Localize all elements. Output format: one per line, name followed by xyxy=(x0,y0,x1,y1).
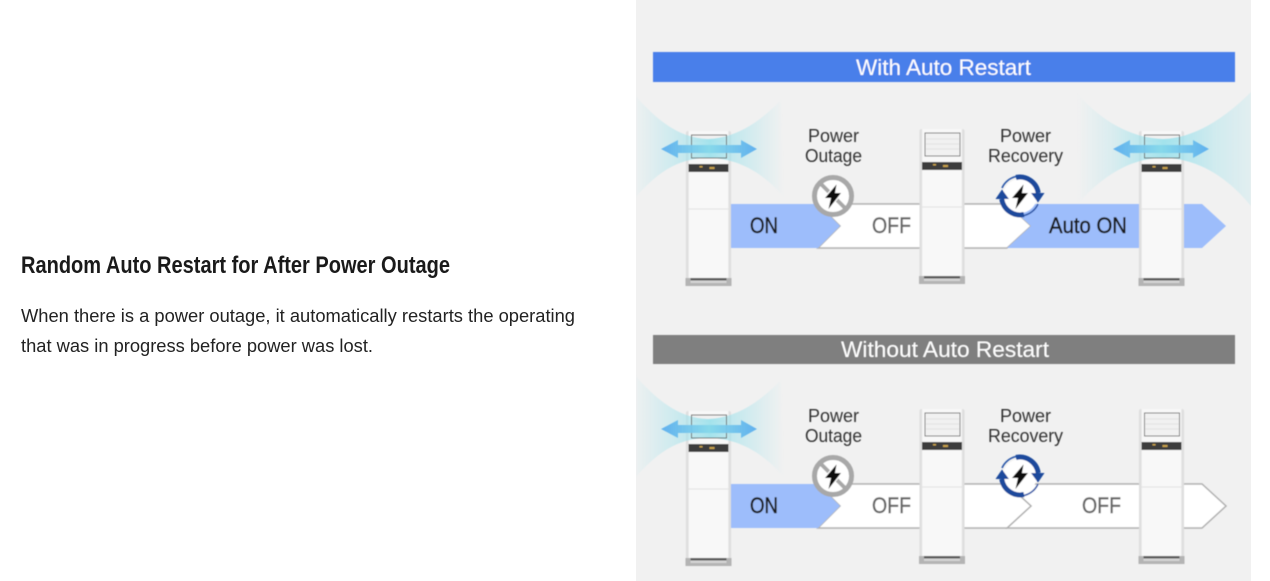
label: power recovery: Power xyxy=(1000,126,1051,146)
label: power outage xyxy=(805,126,862,166)
label: power recovery xyxy=(988,126,1063,166)
air conditioner on with airflow xyxy=(641,384,774,566)
state label: on: ON xyxy=(750,493,778,518)
air conditioner on with airflow xyxy=(641,104,774,286)
header bar: without auto restart: Without Auto Restart xyxy=(841,337,1049,362)
air conditioner auto on with airflow xyxy=(1077,92,1251,286)
air conditioner off xyxy=(919,129,965,284)
description text: that was in progress before power was lost. xyxy=(21,336,373,356)
label: power outage xyxy=(805,406,862,446)
label: power outage: Power xyxy=(808,406,859,426)
air conditioner off xyxy=(919,409,965,564)
icon: no power xyxy=(814,458,852,494)
icon: no power xyxy=(814,178,852,214)
description text xyxy=(21,306,575,356)
air conditioner stays off xyxy=(1138,409,1184,564)
state label: auto on: Auto ON xyxy=(1049,213,1127,238)
state label: remains off: OFF xyxy=(1082,493,1121,518)
label: power outage: Power xyxy=(808,126,859,146)
label: power recovery: Recovery xyxy=(988,146,1063,166)
header bar: with auto restart xyxy=(653,52,1235,82)
section: without auto restart xyxy=(636,335,1235,566)
section: with auto restart xyxy=(636,52,1251,286)
label: power outage: Outage xyxy=(805,146,862,166)
timeline arrows xyxy=(731,204,1226,248)
label: power recovery xyxy=(988,406,1063,446)
label: power recovery: Power xyxy=(1000,406,1051,426)
header bar: with auto restart: With Auto Restart xyxy=(856,55,1031,80)
state label: on: ON xyxy=(750,213,778,238)
icon: power recovery xyxy=(996,176,1044,216)
label: power recovery: Recovery xyxy=(988,426,1063,446)
state label: off: OFF xyxy=(872,213,911,238)
timeline arrows xyxy=(731,484,1226,528)
state label: off: OFF xyxy=(872,493,911,518)
icon: power recovery xyxy=(996,456,1044,496)
heading: Random Auto Restart for After Power Outage xyxy=(21,252,450,279)
description text: When there is a power outage, it automatically restarts the operating xyxy=(21,306,575,326)
panel: diagram background xyxy=(636,0,1251,581)
label: power outage: Outage xyxy=(805,426,862,446)
header bar: without auto restart xyxy=(653,335,1235,364)
